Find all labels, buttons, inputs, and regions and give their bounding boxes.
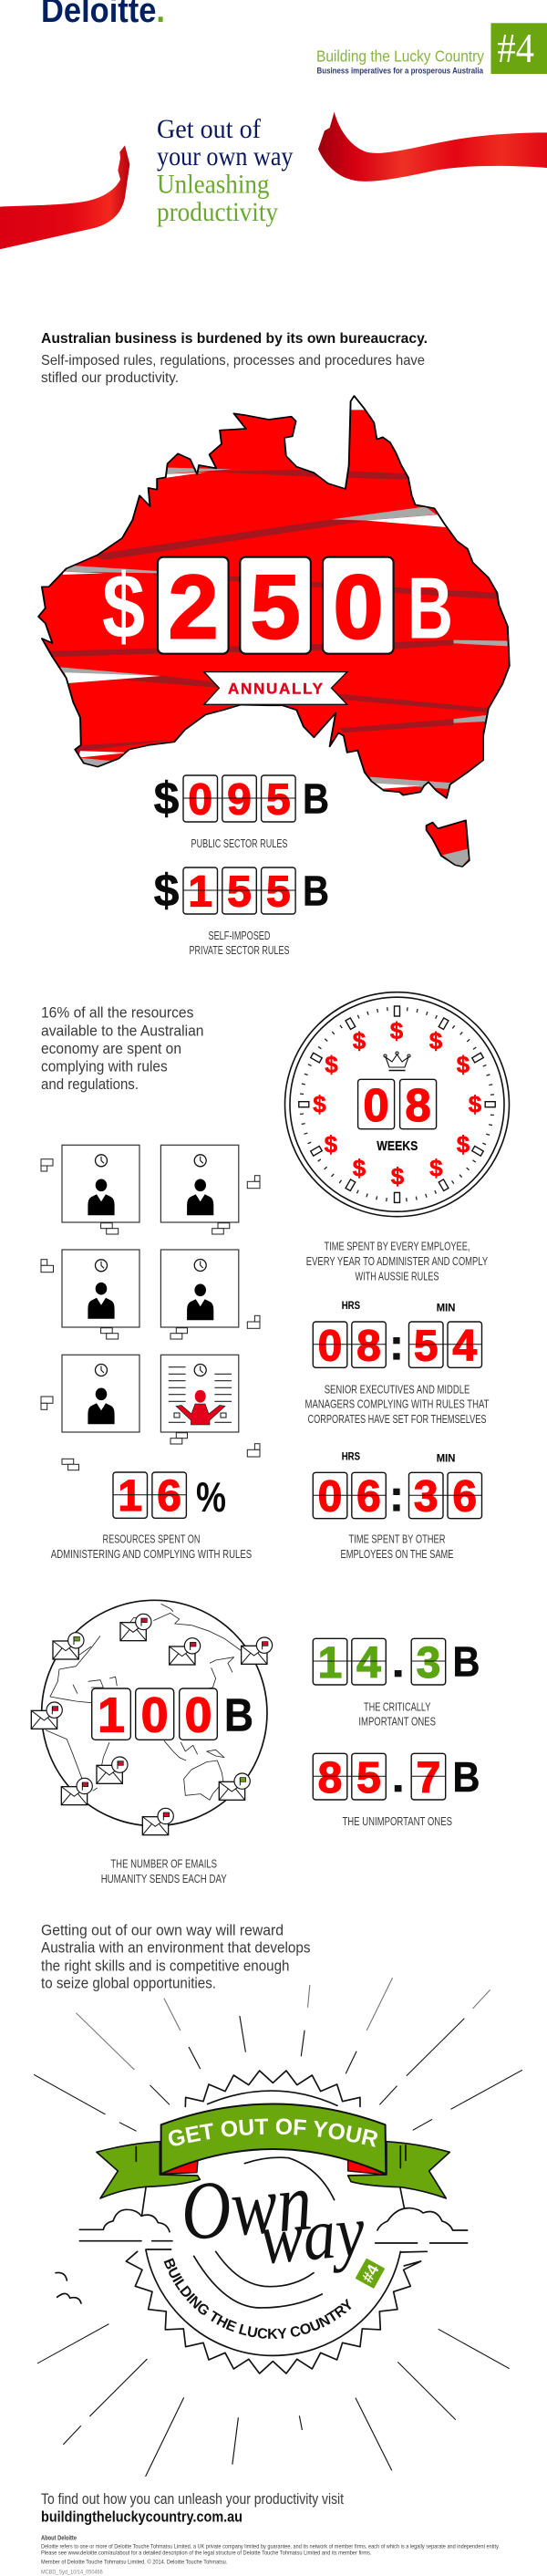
08 counter: 0 (363, 1079, 389, 1131)
gear outline (126, 2071, 427, 2373)
series header (316, 23, 547, 75)
dollar signs around the dial (313, 1017, 482, 1189)
closing paragraph: to seize global opportunities. (41, 1975, 216, 1991)
Tasmania (427, 820, 470, 867)
series subtitle: Business imperatives for a prosperous Australia (317, 66, 484, 75)
about Deloitte legal text: Please see www.deloitte.com/au/about for a detailed description of the legal structure of Deloitte Touche Tohmatsu Limited and its member firms. (41, 2550, 372, 2556)
public sector caption: PUBLIC SECTOR RULES (191, 837, 288, 850)
annually banner: ANNUALLY (228, 680, 324, 698)
dollar signs around the dial: $ (457, 1131, 470, 1158)
private sector counter: 1 (188, 867, 212, 916)
closing paragraph: the right skills and is competitive enough (41, 1958, 290, 1974)
Own way script: Own (178, 2156, 315, 2258)
100B counter: 1 (98, 1688, 125, 1742)
green ribbon with headline (160, 2103, 387, 2175)
08:54 timer: 0 (318, 1322, 342, 1370)
weeks label: WEEKS (377, 1139, 418, 1154)
06:36 caption: EMPLOYEES ON THE SAME (341, 1548, 454, 1561)
85.7B counter (313, 1753, 480, 1802)
Own way script (178, 2156, 368, 2280)
dollar signs around the dial: $ (325, 1051, 338, 1078)
clock caption: TIME SPENT BY EVERY EMPLOYEE, (325, 1241, 470, 1253)
08:54 timer: MIN (437, 1303, 455, 1314)
intro text: Self-imposed rules, regulations, processes and procedures have (41, 353, 425, 369)
dollar signs around the dial: $ (390, 1017, 404, 1044)
call to action (41, 2490, 344, 2525)
06:36 timer: 6 (356, 1473, 381, 1522)
building the lucky country arc: BUILDING THE LUCKY COUNTRY (164, 2258, 352, 2339)
green #4 tag (356, 2259, 385, 2289)
cubicle 5 (62, 1355, 139, 1432)
resources text block (41, 1005, 204, 1093)
16% caption (51, 1533, 252, 1561)
06:36 timer: 0 (318, 1473, 342, 1522)
private sector caption (190, 930, 290, 957)
public sector counter: 5 (266, 776, 291, 825)
crown icon (384, 1052, 410, 1071)
08:54 timer: 5 (414, 1322, 439, 1370)
clock: 08 weeks (284, 992, 509, 1217)
14.3B counter (313, 1638, 480, 1688)
private sector counter: 5 (266, 867, 291, 916)
clouds (56, 2208, 468, 2303)
$250B counter: 0 (333, 556, 384, 657)
100B counter: B (224, 1688, 253, 1740)
cubicle 3 (62, 1250, 139, 1327)
dollar signs around the dial: $ (429, 1155, 443, 1182)
85.7B caption: THE UNIMPORTANT ONES (342, 1815, 452, 1828)
14.3B caption: IMPORTANT ONES (358, 1715, 436, 1728)
08:54 timer: HRS (342, 1301, 360, 1312)
06:36 timer: 3 (414, 1473, 439, 1522)
private sector caption: SELF-IMPOSED (208, 930, 270, 942)
dollar signs around the dial: $ (391, 1162, 405, 1189)
16% caption: RESOURCES SPENT ON (102, 1533, 201, 1546)
main title (157, 115, 294, 227)
08:54 caption: MANAGERS COMPLYING WITH RULES THAT (304, 1398, 490, 1411)
main title: Get out of (157, 115, 261, 144)
right red ribbon (318, 112, 547, 182)
public sector counter: 0 (188, 776, 212, 825)
08:54 caption: SENIOR EXECUTIVES AND MIDDLE (325, 1383, 470, 1396)
green ribbon with headline: GET OUT OF YOUR (168, 2118, 377, 2147)
main title: productivity (157, 198, 278, 227)
green #4 tag: #4 (358, 2261, 383, 2286)
private sector counter: B (303, 867, 329, 915)
about Deloitte legal text: About Deloitte (41, 2536, 77, 2542)
08:54 caption (304, 1383, 490, 1426)
about Deloitte legal text: Member of Deloitte Touche Tohmatsu Limited. © 2014. Deloitte Touche Tohmatsu. (41, 2559, 228, 2566)
green issue number box: #4 (498, 25, 534, 71)
16% counter: % (196, 1473, 226, 1521)
cubicle grid (41, 1145, 260, 1470)
06:36 timer: 6 (452, 1473, 477, 1522)
100B counter (92, 1688, 253, 1742)
paper bricks scattered between cubicles (41, 1159, 260, 1470)
16% counter: 6 (157, 1472, 181, 1521)
globe caption: HUMANITY SENDS EACH DAY (101, 1873, 227, 1885)
08:54 timer (313, 1301, 481, 1370)
16% caption: ADMINISTERING AND COMPLYING WITH RULES (51, 1548, 252, 1561)
cubicle 1 (62, 1145, 139, 1222)
Own way script: way (256, 2191, 368, 2280)
left red ribbon (0, 145, 129, 249)
16% counter (113, 1472, 226, 1521)
resources text block: economy are spent on (41, 1041, 181, 1057)
08:54 caption: CORPORATES HAVE SET FOR THEMSELVES (308, 1413, 487, 1426)
envelopes with flags (31, 1614, 273, 1835)
$250B counter: 2 (168, 556, 219, 657)
map of Australia panel (37, 395, 511, 867)
series title: Building the Lucky Country (316, 47, 484, 66)
85.7B counter: 8 (318, 1754, 342, 1802)
green issue number box (490, 23, 547, 74)
badge: get out of your own way (55, 2070, 469, 2374)
public sector counter: B (303, 775, 329, 823)
resources text block: 16% of all the resources (41, 1005, 193, 1022)
dollar signs around the dial: $ (429, 1027, 443, 1054)
cubicle 4 (160, 1250, 239, 1327)
globe caption (101, 1858, 227, 1885)
private sector counter (154, 866, 329, 917)
06:36 timer: MIN (437, 1454, 455, 1465)
14.3B counter: 4 (356, 1639, 381, 1688)
private sector counter: $ (154, 866, 180, 917)
$250B counter: 5 (250, 556, 301, 657)
about Deloitte legal text: MCBD_Syd_10/14_050466 (41, 2569, 103, 2575)
Australia wrapped in tape (37, 395, 511, 799)
resources text block: and regulations. (41, 1076, 139, 1093)
globe caption: THE NUMBER OF EMAILS (110, 1858, 217, 1871)
85.7B counter: 7 (417, 1754, 440, 1802)
85.7B counter: 5 (356, 1754, 381, 1802)
clock face (284, 992, 509, 1217)
globe with continents (42, 1600, 267, 1826)
06:36 timer (313, 1452, 481, 1522)
08:54 timer: 4 (452, 1322, 477, 1370)
main title: Unleashing (157, 170, 270, 199)
16% counter: 1 (118, 1472, 142, 1521)
100B counter: 0 (141, 1688, 169, 1742)
green ribbon tails (97, 2142, 449, 2198)
14.3B counter: 3 (417, 1639, 440, 1688)
08 counter: 8 (405, 1079, 431, 1131)
14.3B counter: 1 (318, 1639, 342, 1688)
main title: your own way (157, 142, 294, 171)
dollar signs around the dial: $ (313, 1091, 326, 1118)
private sector counter: 5 (227, 867, 252, 916)
100B counter: 0 (184, 1688, 212, 1742)
85.7B counter: B (452, 1753, 480, 1801)
email globe (31, 1600, 273, 1835)
$250B counter (102, 556, 453, 658)
$250B counter: $ (102, 556, 145, 658)
clock caption: EVERY YEAR TO ADMINISTER AND COMPLY (306, 1255, 489, 1268)
14.3B caption: THE CRITICALLY (364, 1700, 431, 1713)
06:36 timer: HRS (342, 1452, 360, 1463)
06:36 caption: TIME SPENT BY OTHER (348, 1533, 445, 1546)
$250B counter: B (408, 559, 453, 657)
intro text: Australian business is burdened by its own bureaucracy. (41, 331, 428, 347)
public sector counter (154, 774, 329, 825)
about Deloitte legal text (41, 2536, 500, 2575)
closing paragraph (41, 1922, 310, 1991)
dollar signs around the dial: $ (353, 1155, 366, 1182)
public sector counter: 9 (227, 776, 252, 825)
14.3B counter: B (452, 1638, 480, 1686)
06:36 caption (341, 1533, 454, 1561)
dollar signs around the dial: $ (469, 1091, 482, 1118)
public sector counter: $ (154, 774, 180, 825)
closing paragraph: Getting out of our own way will reward (41, 1922, 284, 1938)
resources text block: available to the Australian (41, 1023, 204, 1039)
intro text (41, 331, 428, 386)
annually banner (204, 672, 347, 704)
resources text block: complying with rules (41, 1058, 168, 1075)
intro text: stifled our productivity. (41, 370, 179, 386)
08 counter (358, 1079, 437, 1131)
dollar signs around the dial: $ (457, 1051, 470, 1078)
dollar signs around the dial: $ (325, 1131, 338, 1158)
cubicle 6: red figure buried in paperwork (160, 1355, 239, 1432)
closing paragraph: Australia with an environment that develops (41, 1940, 310, 1957)
sun rays around badge (34, 1978, 522, 2477)
clock caption: WITH AUSSIE RULES (356, 1270, 439, 1283)
cubicle 2 (160, 1145, 239, 1222)
dollar signs around the dial: $ (353, 1027, 366, 1054)
private sector caption: PRIVATE SECTOR RULES (190, 944, 290, 957)
08:54 timer: 8 (356, 1322, 381, 1370)
call to action: To find out how you can unleash your productivity visit (41, 2490, 344, 2508)
call to action: buildingtheluckycountry.com.au (41, 2508, 243, 2525)
14.3B caption (358, 1700, 436, 1728)
clock caption (306, 1241, 489, 1283)
